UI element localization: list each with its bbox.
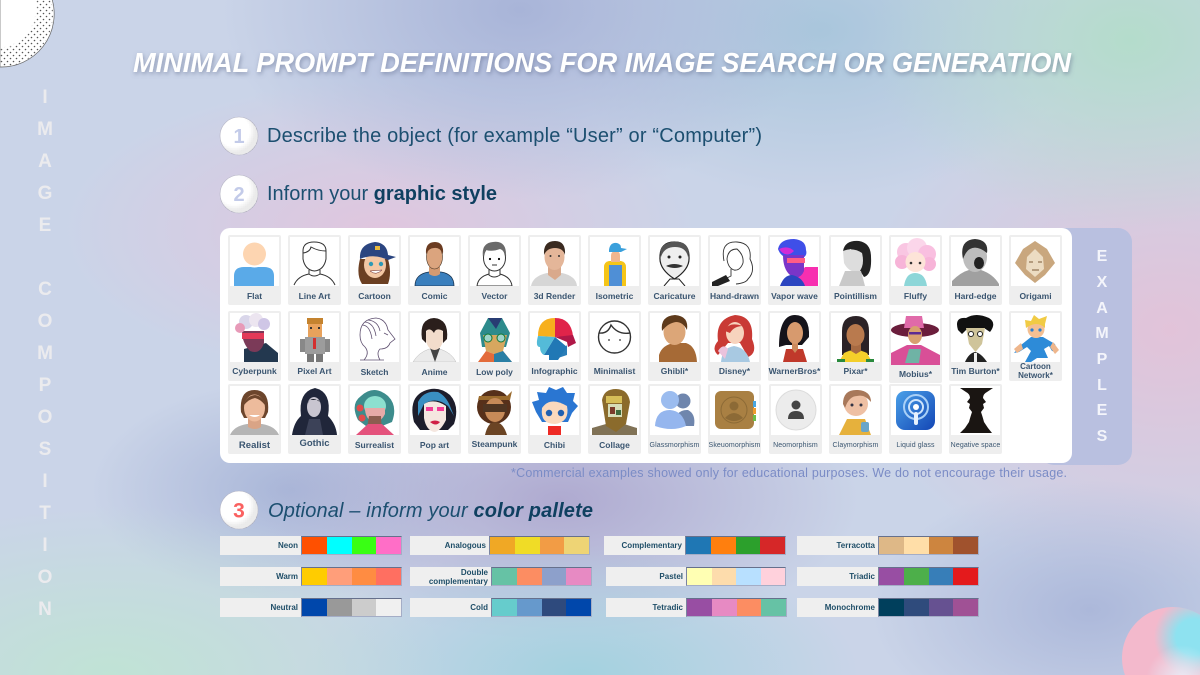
- tile: Surrealist: [348, 384, 401, 454]
- tile: Disney: Disney*: [719, 366, 750, 376]
- tile: Neomorphism: Neomorphism: [773, 442, 818, 449]
- tile: Neomorphism: [769, 384, 822, 454]
- step 1 badge: 1: [233, 126, 245, 148]
- tile: Pixar: [829, 311, 882, 381]
- decorative circle bottom right: [1122, 607, 1200, 675]
- tile: Cyberpunk: Cyberpunk: [232, 366, 277, 376]
- palette: Pastel: [606, 567, 786, 586]
- tile: Realist: [228, 384, 281, 454]
- tile: Negative space: Negative space: [951, 442, 1000, 449]
- sidebar vertical label: image composition: O: [38, 311, 52, 332]
- tile: Caricature: [648, 235, 701, 305]
- sidebar vertical label: image composition: O: [38, 407, 52, 428]
- tile: Vector: Vector: [482, 291, 508, 301]
- tile: Collage: Collage: [599, 440, 630, 450]
- tile: 3d Render: 3d Render: [534, 291, 575, 301]
- tile: Disney: [708, 311, 761, 381]
- tile: Cartoon Network: Cartoon Network*: [1018, 362, 1053, 380]
- tile: Cartoon Network: [1009, 311, 1062, 381]
- style tiles: [228, 235, 1062, 454]
- sidebar vertical label: image composition: M: [37, 343, 53, 364]
- tile: Cartoon: Cartoon: [358, 291, 391, 301]
- decorative circle top left: [0, 0, 54, 68]
- tile: Cyberpunk: [228, 311, 281, 381]
- tile: Comic: [408, 235, 461, 305]
- palette: Neutral: Neutral: [270, 603, 298, 612]
- palette: Triadic: Triadic: [849, 572, 875, 581]
- tile: Hard-edge: [949, 235, 1002, 305]
- tile: Skeuomorphism: Skeuomorphism: [709, 442, 760, 449]
- tile: Tim Burton: [949, 311, 1002, 381]
- sidebar vertical label: image composition: T: [39, 503, 51, 524]
- tile: Steampunk: Steampunk: [472, 439, 517, 449]
- palette: Pastel: Pastel: [659, 572, 683, 581]
- tile: Hand-drawn: Hand-drawn: [710, 291, 759, 301]
- tile: WarnerBros: [768, 311, 821, 381]
- tile: 3d Render: [528, 235, 581, 305]
- tile: Vector: [468, 235, 521, 305]
- sidebar vertical label: image composition: C: [38, 279, 52, 300]
- sidebar vertical label: image composition: M: [37, 119, 53, 140]
- sidebar vertical label: image composition: I: [42, 87, 48, 108]
- tile: Fluffy: [889, 235, 942, 305]
- tile: Hand-drawn: [708, 235, 761, 305]
- palette: Double complementary: [410, 567, 592, 586]
- examples vertical label: P: [1097, 351, 1107, 368]
- sidebar vertical label: image composition: O: [38, 567, 52, 588]
- tile: Pixel Art: [288, 311, 341, 381]
- palette: Cold: Cold: [470, 603, 488, 612]
- tile: Claymorphism: [829, 384, 882, 454]
- palette: Monochrome: [797, 598, 979, 617]
- examples vertical label: E: [1097, 248, 1107, 265]
- tile: Negative space: [949, 384, 1002, 454]
- tile: Glassmorphism: [648, 384, 701, 454]
- palette: Double complementary: Double complementary: [429, 568, 488, 586]
- palette: Complementary: Complementary: [622, 541, 682, 550]
- tile: Isometric: Isometric: [596, 291, 633, 301]
- tile: Hard-edge: Hard-edge: [954, 291, 997, 301]
- tile: Collage: [588, 384, 641, 454]
- tile: Origami: [1009, 235, 1062, 305]
- sidebar vertical label: image composition: P: [39, 375, 51, 396]
- tile: Line Art: Line Art: [299, 291, 330, 301]
- palette: Analogous: [410, 536, 590, 555]
- palette: Complementary: [604, 536, 786, 555]
- tile: Claymorphism: Claymorphism: [833, 442, 878, 449]
- examples vertical label: L: [1097, 377, 1107, 394]
- tile: Mobius: Mobius*: [899, 369, 932, 379]
- tile: Flat: Flat: [247, 291, 262, 301]
- sidebar vertical label: image composition: G: [38, 183, 52, 204]
- tile: Pointillism: [829, 235, 882, 305]
- palette: Warm: [220, 567, 402, 586]
- palette: Triadic: [797, 567, 979, 586]
- tile: Gothic: [288, 384, 341, 454]
- examples vertical label: M: [1095, 325, 1109, 342]
- tile: Flat: [228, 235, 281, 305]
- sidebar vertical label: image composition: [37, 87, 53, 620]
- tile: Chibi: [528, 384, 581, 454]
- sidebar vertical label: image composition: I: [42, 471, 48, 492]
- tile: Mobius: [889, 311, 942, 383]
- tile: Steampunk: [468, 384, 521, 454]
- examples vertical label: X: [1097, 274, 1107, 291]
- sidebar vertical label: image composition: I: [42, 535, 48, 556]
- step 2 badge: 2: [233, 184, 245, 206]
- panel: examples tab: [1040, 228, 1132, 465]
- tile: Sketch: [348, 311, 401, 381]
- tile: Liquid glass: Liquid glass: [896, 442, 935, 449]
- step 3 badge: [220, 490, 258, 530]
- tile: Origami: Origami: [1019, 291, 1052, 301]
- tile: Sketch: Sketch: [361, 367, 388, 377]
- palette: Neutral: [220, 598, 402, 617]
- sidebar vertical label: image composition: A: [38, 151, 52, 172]
- examples vertical label: [1095, 248, 1109, 445]
- tile: Low poly: Low poly: [476, 367, 513, 377]
- tile: Line Art: [288, 235, 341, 305]
- examples vertical label: S: [1097, 428, 1107, 445]
- examples vertical label: E: [1097, 402, 1107, 419]
- step 3 text: Optional – inform your color pallete: [268, 500, 593, 522]
- step 1 text: Describe the object (for example “User” or “Computer”): [267, 125, 762, 147]
- palette: Warm: Warm: [276, 572, 298, 581]
- sidebar vertical label: image composition: N: [38, 599, 52, 620]
- tile: WarnerBros: WarnerBros*: [769, 366, 820, 376]
- tile: Vapor wave: Vapor wave: [771, 291, 818, 301]
- tile: Minimalist: Minimalist: [594, 366, 635, 376]
- tile: Ghibli: [648, 311, 701, 381]
- step 2 text: Inform your graphic style: [267, 183, 497, 205]
- tile: Gothic: Gothic: [299, 438, 330, 449]
- step 2 badge: [220, 174, 258, 214]
- tile: Caricature: Caricature: [653, 291, 696, 301]
- tile: Surrealist: Surrealist: [355, 440, 394, 450]
- tile: Chibi: Chibi: [544, 440, 565, 450]
- tile: Glassmorphism: Glassmorphism: [650, 442, 699, 449]
- tile: Anime: Anime: [422, 367, 447, 377]
- palette: Terracotta: Terracotta: [836, 541, 875, 550]
- examples vertical label: A: [1096, 300, 1108, 317]
- title: MINIMAL PROMPT DEFINITIONS FOR IMAGE SEARCH OR GENERATION: [133, 47, 1072, 78]
- tile: Infographic: Infographic: [531, 366, 578, 376]
- palette: Neon: Neon: [278, 541, 298, 550]
- tile: Cartoon: [348, 235, 401, 305]
- tile: Isometric: [588, 235, 641, 305]
- palette: Tetradic: [606, 598, 787, 617]
- tile: Fluffy: Fluffy: [904, 291, 927, 301]
- tile: Minimalist: [588, 311, 641, 381]
- tile: Realist: Realist: [239, 440, 270, 451]
- tile: Infographic: [528, 311, 581, 381]
- panel: style gallery: [220, 228, 1072, 463]
- sidebar vertical label: image composition: E: [39, 215, 51, 236]
- tile: Anime: [408, 311, 461, 381]
- tile: Skeuomorphism: [708, 384, 761, 454]
- tile: Comic: Comic: [422, 291, 447, 301]
- palette: Tetradic: Tetradic: [652, 603, 683, 612]
- tile: Pop art: [408, 384, 461, 454]
- palette: Cold: [410, 598, 592, 617]
- palette: Neon: [220, 536, 402, 555]
- tile: Vapor wave: [768, 235, 821, 305]
- tile: Pointillism: Pointillism: [834, 291, 877, 301]
- tile: Liquid glass: [889, 384, 942, 454]
- tile: Pixar: Pixar*: [843, 366, 868, 376]
- palette: Monochrome: Monochrome: [825, 603, 875, 612]
- tile: Tim Burton: Tim Burton*: [951, 366, 1000, 376]
- palette: Terracotta: [797, 536, 979, 555]
- palette: Analogous: Analogous: [445, 541, 486, 550]
- tile: Pop art: Pop art: [420, 440, 449, 450]
- step 3 badge: 3: [233, 500, 245, 522]
- tile: Ghibli: Ghibli*: [661, 366, 688, 376]
- step 1 badge: [220, 116, 258, 156]
- sidebar vertical label: image composition: S: [39, 439, 51, 460]
- tile: Low poly: [468, 311, 521, 381]
- footnote: *Commercial examples showed only for educational purposes. We do not encourage their usage.: [511, 466, 1067, 480]
- tile: Pixel Art: Pixel Art: [297, 366, 332, 376]
